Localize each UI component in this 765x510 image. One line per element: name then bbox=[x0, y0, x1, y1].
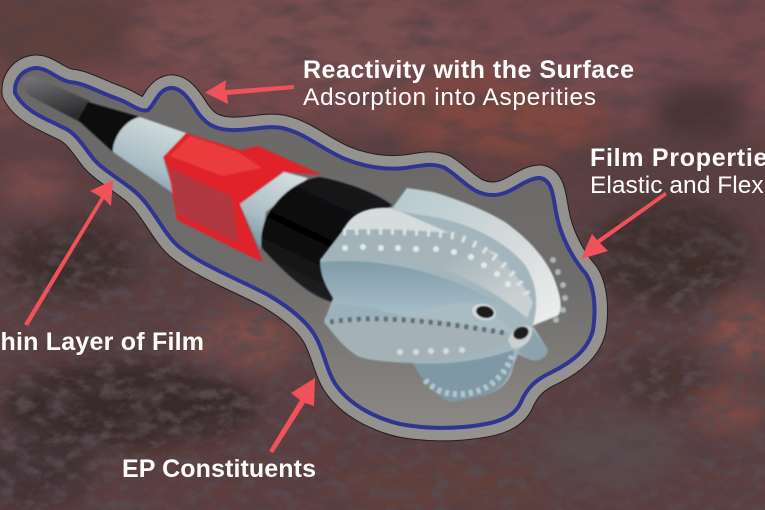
top blade bbox=[320, 229, 533, 318]
silver section bbox=[113, 117, 186, 194]
center nozzle bbox=[508, 326, 532, 348]
second silver section bbox=[240, 172, 308, 250]
center nozzle hole bbox=[511, 324, 531, 342]
red stabilizer recess bbox=[170, 168, 238, 243]
shoulder bbox=[343, 208, 500, 255]
large black collar bbox=[261, 177, 392, 302]
bit silhouette bbox=[320, 188, 561, 402]
rim cutters bbox=[550, 257, 568, 323]
inner film fill with blue film line bbox=[15, 68, 595, 428]
label: film properties bbox=[590, 144, 765, 199]
top blade cutters bbox=[342, 244, 511, 287]
right blade bbox=[518, 330, 548, 361]
label: reactivity with the surface: Reactivity with the Surface bbox=[303, 56, 634, 84]
red stabilizer bbox=[163, 133, 323, 262]
arrow: reactivity with the surface bbox=[205, 80, 294, 104]
label: reactivity with the surface bbox=[303, 56, 634, 111]
side nozzle bbox=[471, 302, 497, 322]
film outline bbox=[15, 68, 595, 428]
nozzle blade bbox=[410, 303, 513, 335]
back lower blade bbox=[324, 303, 410, 320]
red highlight bbox=[170, 136, 262, 176]
front blade cutters bbox=[397, 347, 465, 355]
film envelope around the drill bbox=[15, 68, 595, 428]
lower body bbox=[320, 260, 500, 318]
black collar bbox=[78, 102, 140, 152]
lower blade teeth bbox=[425, 355, 512, 394]
dark tip bbox=[24, 76, 90, 122]
outer film layer bbox=[15, 68, 595, 428]
front blade teeth bbox=[330, 319, 505, 333]
arrow: EP constituents bbox=[269, 378, 315, 453]
arrow: thin layer of film bbox=[24, 180, 113, 326]
side nozzle hole bbox=[475, 304, 495, 320]
label: EP constituents: EP Constituents bbox=[122, 455, 316, 483]
top blade ribs bbox=[343, 231, 530, 300]
front blade bbox=[324, 317, 510, 362]
back wing blade bbox=[392, 188, 561, 325]
lower rear blade bbox=[413, 350, 514, 402]
arrow: film properties bbox=[581, 192, 667, 259]
label: reactivity with the surface: Adsorption into Asperities bbox=[303, 84, 596, 111]
drill bit bbox=[320, 188, 568, 402]
drill string bbox=[24, 76, 392, 302]
